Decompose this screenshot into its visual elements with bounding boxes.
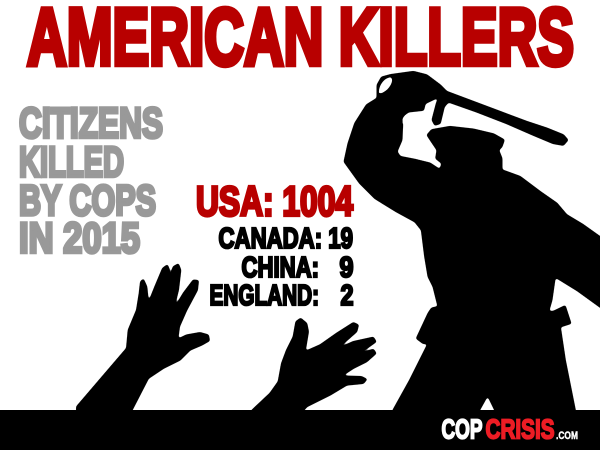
statistics: other countries — [210, 223, 354, 312]
logo: CopCrisis.com: COP — [442, 414, 482, 444]
icon: raised left hand — [77, 264, 209, 420]
icon: raised right hand — [243, 318, 376, 420]
logo: CopCrisis.com: .COM — [556, 430, 578, 442]
statistics: other countries: 9 — [340, 252, 354, 284]
statistics: other countries: ENGLAND: — [210, 280, 319, 312]
icon: police officer silhouette with baton — [344, 72, 600, 420]
subtitle: citizens killed by cops in 2015 — [19, 100, 163, 262]
statistics: other countries: CHINA: — [242, 252, 319, 284]
statistics: other countries: CANADA: 19 — [218, 223, 353, 255]
statistics: other countries: 2 — [340, 280, 354, 312]
subtitle: citizens killed by cops in 2015: KILLED — [19, 138, 124, 186]
statistic: USA: USA: 1004 — [196, 178, 353, 224]
subtitle: citizens killed by cops in 2015: IN 2015 — [19, 214, 140, 262]
logo: CopCrisis.com: CRISIS — [486, 414, 554, 444]
footer bar — [0, 410, 600, 450]
logo: CopCrisis.com — [442, 414, 578, 444]
subtitle: citizens killed by cops in 2015: CITIZENS — [19, 100, 163, 148]
subtitle: citizens killed by cops in 2015: BY COPS — [19, 177, 156, 225]
